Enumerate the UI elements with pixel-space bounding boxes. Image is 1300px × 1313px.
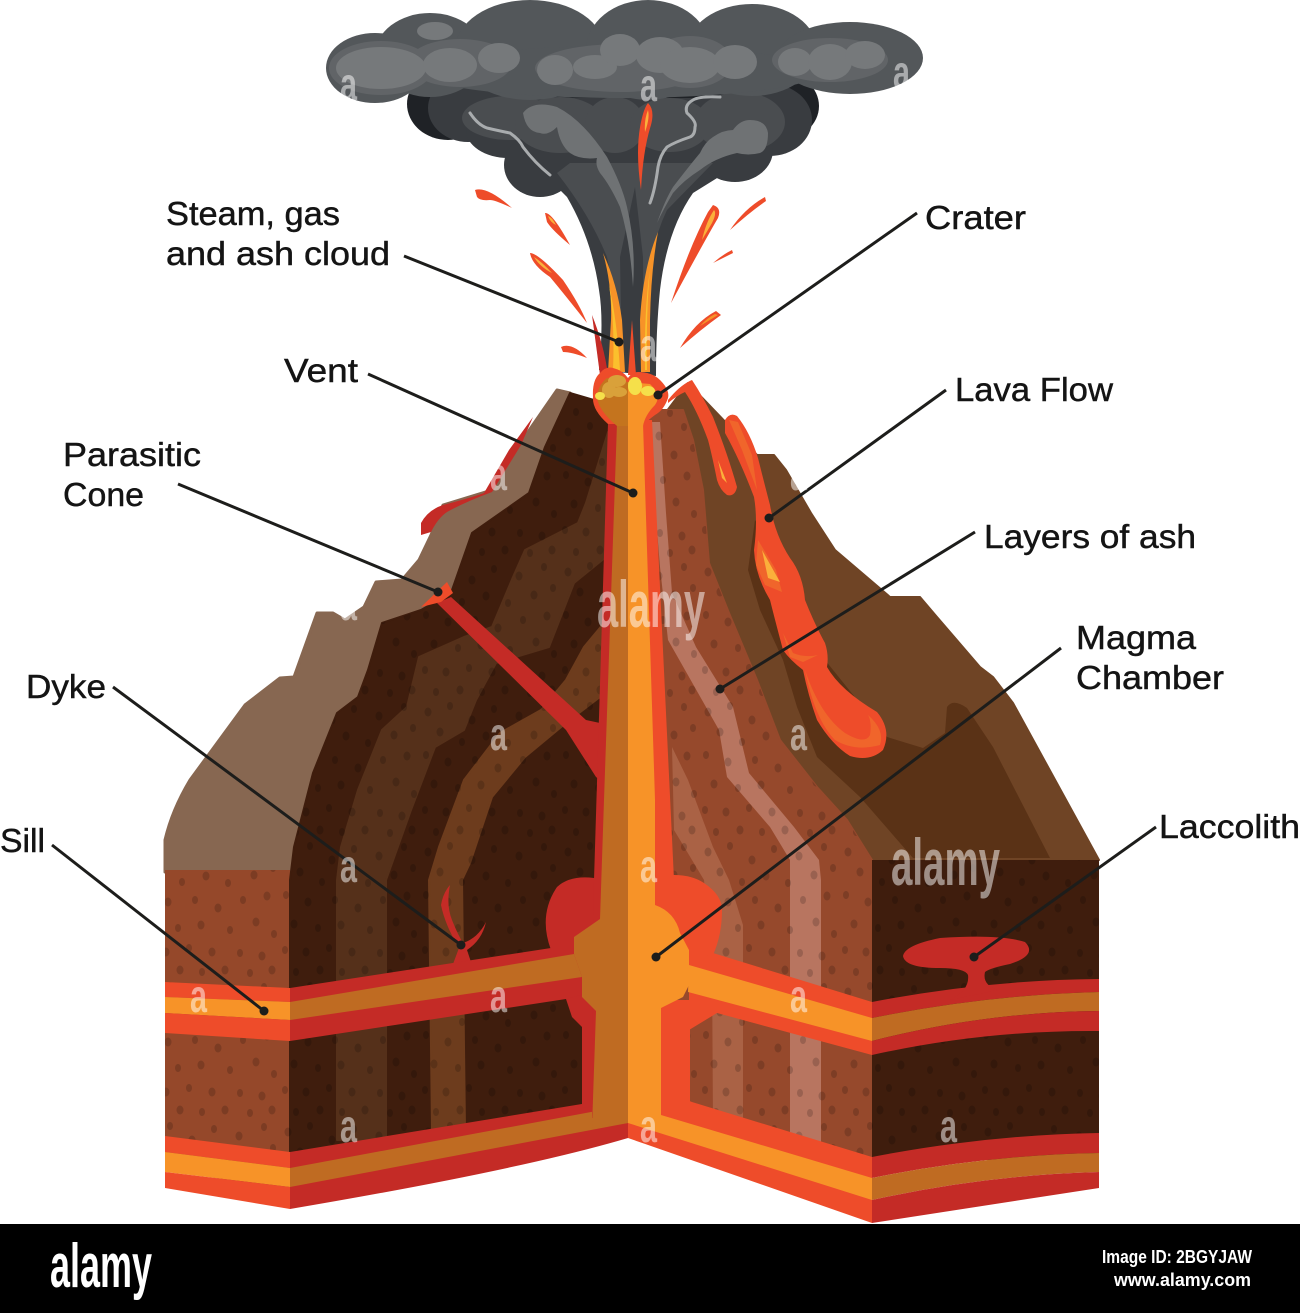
label: sill: Sill <box>0 822 45 859</box>
left front face <box>165 870 290 1190</box>
lava jets and splashes <box>475 103 766 375</box>
upper cloud body <box>326 0 923 103</box>
right outer slope <box>640 383 1099 860</box>
upper cloud light patches <box>336 22 885 89</box>
watermarks: a <box>790 970 807 1022</box>
leader lines <box>52 213 1156 1016</box>
watermarks <box>190 46 1000 1152</box>
watermarks: a <box>490 448 507 500</box>
steam, gas and ash cloud <box>326 0 923 376</box>
left wall <box>290 393 628 1160</box>
lower cloud, mid lobes <box>462 92 785 330</box>
central vent, left half <box>574 423 628 1128</box>
parasitic dyke <box>437 597 600 780</box>
plume dark core <box>620 187 644 372</box>
footer image id: Image ID: 2BGYJAW <box>1102 1247 1252 1267</box>
rock speckle texture <box>165 390 1105 1190</box>
right wall <box>628 410 872 1170</box>
lower band, left face <box>165 1136 290 1209</box>
watermarks: a <box>490 708 507 760</box>
left outer slope <box>165 390 600 880</box>
laccolith <box>903 937 1029 1000</box>
watermarks: a <box>893 46 910 98</box>
crater <box>593 368 668 426</box>
watermarks: a <box>790 708 807 760</box>
label: cone: Cone <box>63 476 144 513</box>
smoke wisps <box>470 97 720 203</box>
lower band, right face <box>872 1133 1099 1223</box>
lava on left slope <box>421 417 533 535</box>
small dyke branch <box>441 885 486 964</box>
watermarks: a <box>340 58 357 110</box>
label: chamber: Chamber <box>1076 659 1224 696</box>
watermarks: a <box>940 1100 957 1152</box>
right magma chamber lobe <box>640 420 722 1110</box>
lower cloud, black rim <box>407 68 819 140</box>
right wall sill <box>688 950 872 1055</box>
watermarks: a <box>640 840 657 892</box>
watermarks: a <box>190 970 207 1022</box>
parasitic cone cap <box>421 582 453 607</box>
watermarks: a <box>640 319 657 371</box>
right front face <box>872 860 1099 1160</box>
label: crater: Crater <box>925 199 1026 236</box>
upper sill, left face <box>165 982 290 1041</box>
label: second line of steam label: and ash cloud <box>166 235 390 272</box>
watermarks: alamy <box>597 567 705 641</box>
left wall ash stripes <box>337 432 608 1140</box>
lower band, right wall <box>628 1090 872 1223</box>
left magma chamber lobes <box>546 423 617 1118</box>
watermarks: a <box>490 970 507 1022</box>
watermarks: a <box>790 448 807 500</box>
upper sill, right face <box>872 979 1099 1055</box>
label: laccolith: Laccolith <box>1159 808 1300 845</box>
watermarks: a <box>340 578 357 630</box>
main lava flow <box>668 380 886 758</box>
label: steam, gas and ash cloud: Steam, gas <box>166 195 340 232</box>
dark slope shadow <box>748 520 1050 858</box>
label: magma: Magma <box>1076 619 1197 656</box>
central vent, right half <box>628 423 689 1123</box>
watermarks: a <box>340 840 357 892</box>
lower cloud, dark lobes <box>428 74 812 197</box>
watermarks: a <box>640 59 657 111</box>
lower band, left wall <box>290 1100 628 1209</box>
right wall ash stripes <box>650 422 821 1145</box>
label: parasitic: Parasitic <box>63 436 201 473</box>
label: lava flow: Lava Flow <box>955 371 1113 408</box>
footer url: www.alamy.com <box>1113 1270 1251 1290</box>
plume column <box>540 170 730 376</box>
label: layers of ash: Layers of ash <box>984 518 1196 555</box>
label: vent: Vent <box>284 352 358 389</box>
black footer bar <box>0 1224 1300 1313</box>
plume highlights <box>523 105 768 287</box>
watermarks: alamy <box>891 825 1000 899</box>
label: dyke: Dyke <box>26 668 106 705</box>
upper sill, left wall <box>290 940 600 1041</box>
footer logo: alamy <box>50 1232 152 1301</box>
upper cloud mid tone <box>329 36 888 95</box>
watermarks: a <box>640 1100 657 1152</box>
watermarks: a <box>340 1100 357 1152</box>
